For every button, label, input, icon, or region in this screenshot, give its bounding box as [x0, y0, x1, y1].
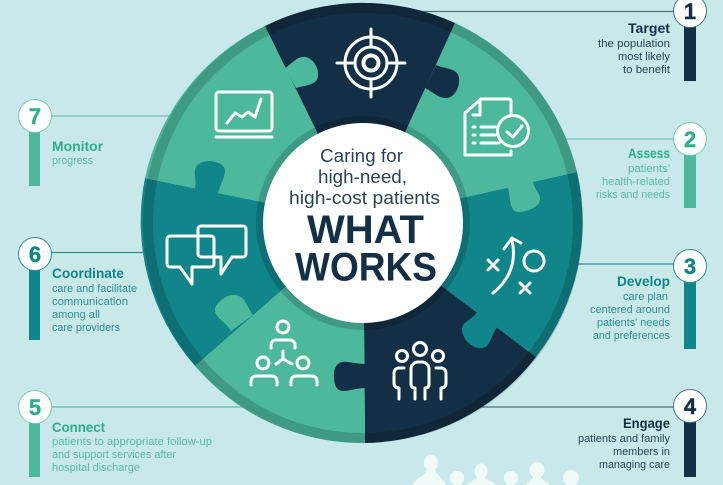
step 6: coordinate: Coordinate	[52, 266, 124, 281]
step 6: coordinate: communication	[52, 296, 128, 308]
step 4: engage: patients and family	[578, 433, 671, 445]
step 3: develop: centered around	[590, 304, 670, 316]
step 6: coordinate: among all	[52, 309, 100, 321]
step 5: connect	[18, 390, 212, 477]
step 7: monitor: 7	[29, 104, 41, 129]
step 2: assess: patients'	[628, 163, 670, 175]
step 1: target	[598, 0, 706, 81]
center title: WHAT	[307, 208, 424, 252]
step 4: engage: Engage	[623, 416, 670, 431]
step 6: coordinate	[18, 238, 137, 340]
icon: monitor chart	[216, 92, 272, 137]
puzzle wheel	[141, 3, 583, 443]
puzzle tabs	[195, 57, 540, 391]
center title: high-cost patients	[289, 187, 440, 208]
step 5: connect: Connect	[52, 420, 105, 435]
center title	[289, 145, 440, 290]
step 4: engage: 4	[684, 394, 697, 419]
step 4: engage: managing care	[599, 459, 670, 471]
step 6: coordinate: care and facilitate	[52, 283, 137, 295]
icon: network of people	[251, 321, 317, 385]
step 3: develop: care plan	[623, 291, 668, 303]
step 3: develop: Develop	[617, 274, 670, 289]
step 2: assess: 2	[684, 127, 696, 152]
segment: assess	[363, 23, 577, 223]
step 2: assess: risks and needs	[596, 189, 671, 201]
center title: WORKS	[295, 246, 437, 290]
step 6: coordinate: care providers	[52, 322, 121, 334]
step 5: connect: patients to appropriate follow-up	[52, 436, 212, 448]
icon: target	[337, 29, 405, 97]
step 1: target: the population	[598, 38, 670, 50]
icon: speech bubbles	[167, 226, 246, 284]
connector lines	[45, 12, 680, 407]
segment: develop	[363, 172, 583, 357]
step 4: engage	[578, 390, 706, 477]
step 7: monitor	[18, 100, 104, 186]
step 1: target: Target	[628, 21, 671, 36]
wheel outer and inner rims	[148, 8, 578, 438]
step 7: monitor: progress	[52, 155, 94, 167]
segment: coordinate	[141, 178, 363, 366]
step 5: connect: 5	[29, 395, 41, 420]
segment: connect	[195, 223, 365, 443]
segment: engage	[363, 223, 536, 443]
step 1: target: most likely	[618, 51, 671, 63]
step 2: assess: health-related	[602, 176, 670, 188]
segment: monitor	[145, 26, 363, 223]
step 5: connect: and support services after	[52, 449, 176, 461]
step 3: develop: patients' needs	[597, 317, 671, 329]
center title: Caring for	[320, 145, 403, 166]
segment: target	[265, 3, 455, 223]
center white circle	[263, 123, 463, 323]
step 4: engage: members in	[613, 446, 670, 458]
icon: people group	[394, 342, 446, 399]
step 3: develop: 3	[684, 254, 696, 279]
icon: document with checkmark	[465, 99, 528, 155]
step 1: target: to benefit	[623, 64, 670, 76]
crowd silhouette	[412, 454, 579, 485]
icon: strategy play	[488, 238, 544, 293]
step 3: develop	[590, 250, 706, 349]
step 5: connect: hospital discharge	[52, 462, 140, 474]
step 6: coordinate: 6	[29, 242, 41, 267]
step 3: develop: and preferences	[593, 330, 671, 342]
center title: high-need,	[318, 166, 407, 187]
step 2: assess: Assess	[628, 146, 670, 161]
step 7: monitor: Monitor	[52, 139, 104, 154]
step 2: assess	[596, 122, 706, 208]
